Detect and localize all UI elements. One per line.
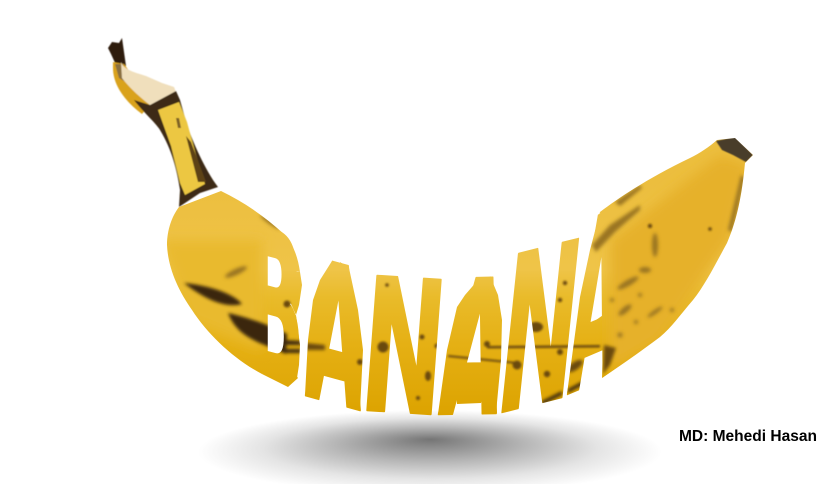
ground shadow [198, 410, 662, 484]
banana tip [716, 137, 753, 162]
spots [284, 224, 712, 400]
left body smoothing [160, 240, 262, 350]
ridge streaks and speckles [224, 175, 745, 338]
author credit: MD: Mehedi Hasan [679, 428, 817, 445]
banana peel with BANANA lettering [150, 130, 770, 420]
right end shading [610, 155, 750, 370]
banana stem [108, 38, 218, 207]
dark bruises [184, 283, 616, 405]
